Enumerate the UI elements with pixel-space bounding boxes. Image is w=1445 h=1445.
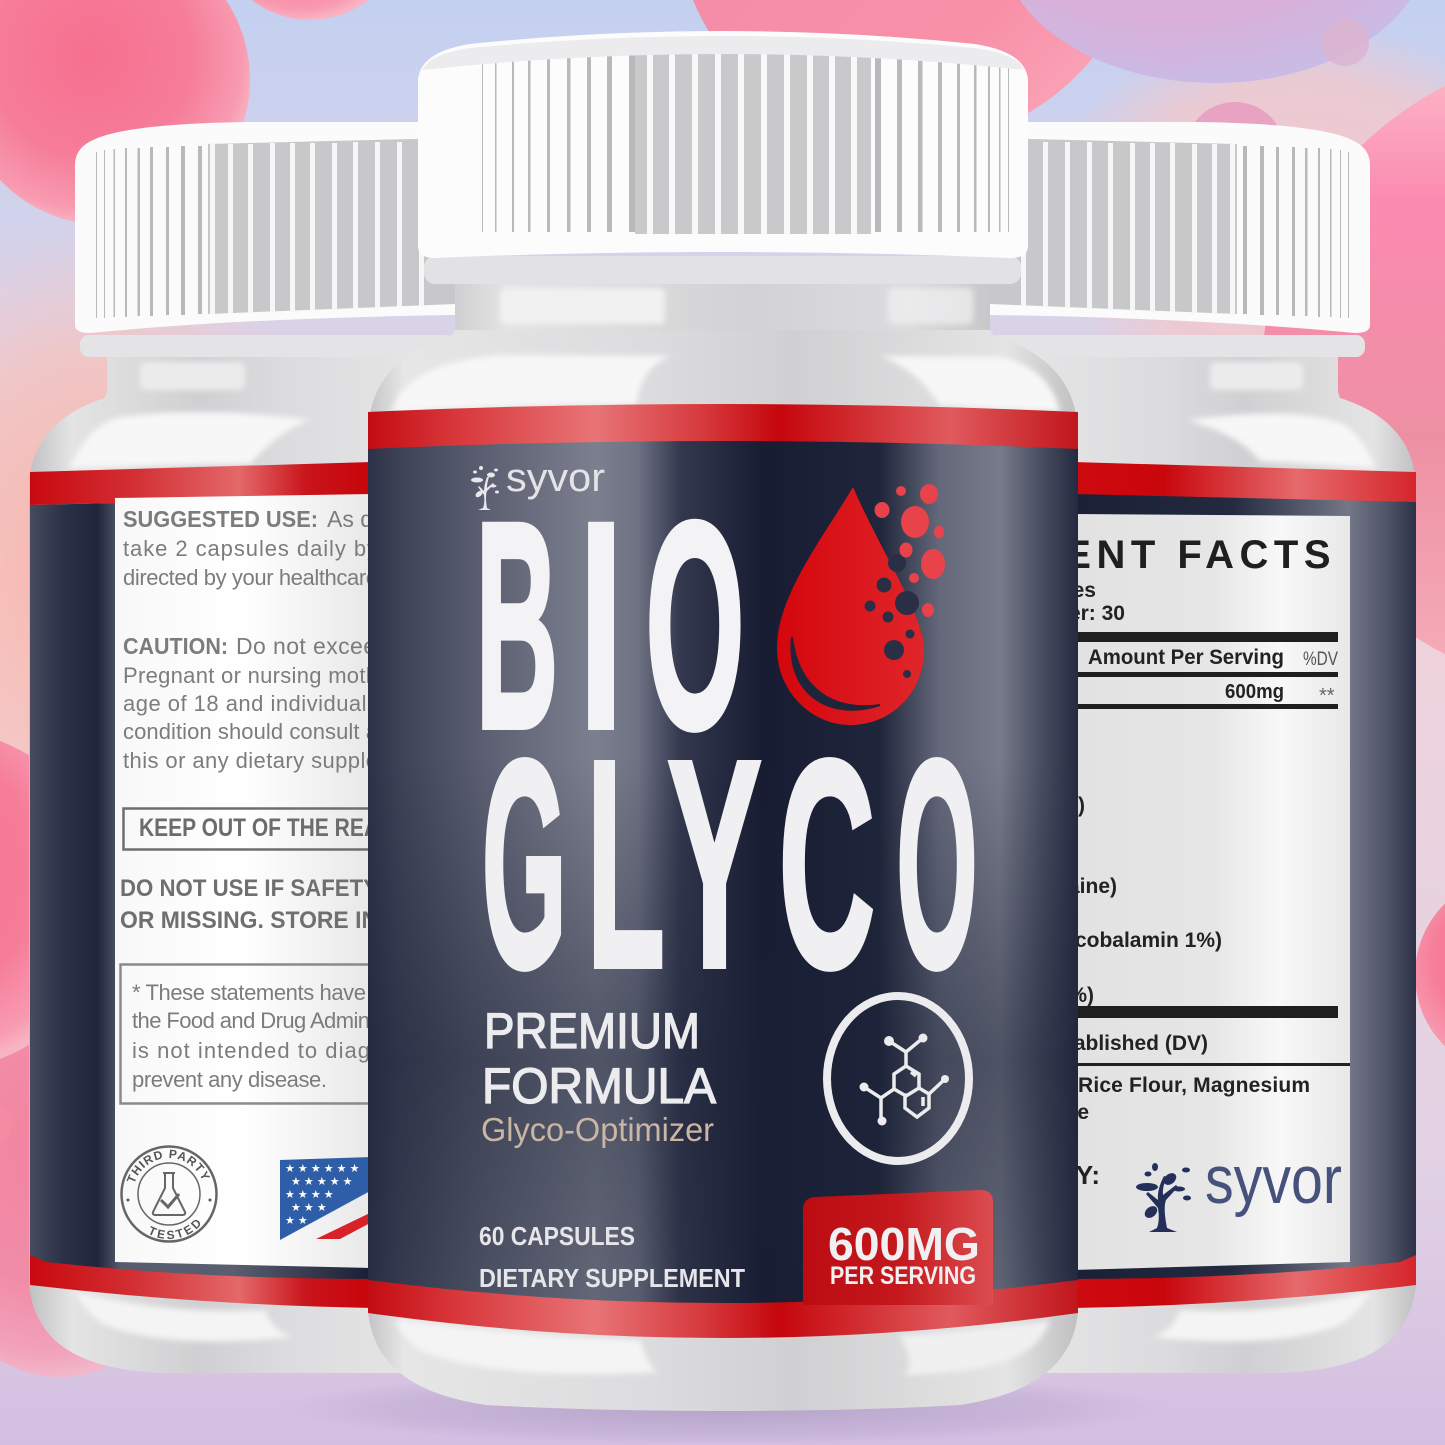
navy label xyxy=(368,441,1078,1304)
other ingredients text: Rice Flour, Magnesium xyxy=(1078,1074,1310,1097)
left bottle: back label xyxy=(29,122,455,1373)
keep out of reach box: KEEP OUT OF THE REA xyxy=(139,814,379,842)
caution text: age of 18 and individuals xyxy=(123,691,378,716)
center bottle: front label xyxy=(368,31,1078,1411)
right bottle shell xyxy=(990,335,1416,1373)
third party tested badge xyxy=(120,1145,218,1243)
title: GLYCO: Y xyxy=(668,699,761,1029)
right shoulder highlight xyxy=(1187,414,1375,468)
left base highlight xyxy=(75,1292,292,1341)
american flag: ★ ★ ★ ★ ★ xyxy=(291,1176,353,1188)
do not use warning: DO NOT USE IF SAFETY xyxy=(120,875,378,902)
suggested use text: take 2 capsules daily by xyxy=(123,536,378,561)
left bottle cap xyxy=(75,122,455,333)
title: GLYCO: L xyxy=(587,699,665,1029)
suggested use text: As d xyxy=(327,506,373,532)
supplement facts heading: SUPPLEMENT FACTS xyxy=(832,533,1336,577)
center bottle: front label: O xyxy=(645,462,745,790)
left bottle shell xyxy=(29,335,455,1373)
right neck highlight xyxy=(1210,362,1303,390)
title: BIO: B xyxy=(476,462,558,790)
right label red band bottom xyxy=(1073,1255,1416,1308)
right base highlight xyxy=(1153,1292,1370,1341)
serving info xyxy=(847,579,1125,625)
facts table: 1%) xyxy=(1048,794,1085,817)
suggested use text xyxy=(123,506,378,590)
shoulder highlight right xyxy=(880,356,1060,412)
american flag: ★ ★ ★ xyxy=(291,1202,327,1214)
center bottle shell xyxy=(368,280,1078,1411)
facts table xyxy=(1000,632,1350,1066)
third party tested badge: THIRD PARTY xyxy=(126,1150,210,1182)
title: GLYCO xyxy=(482,699,978,1029)
icon: blood drop xyxy=(777,484,945,725)
serving info: Servings Per Container: 30 xyxy=(857,602,1125,625)
do not use warning xyxy=(120,875,378,934)
center bottle: front label: O xyxy=(896,699,978,1029)
caution text: Do not excee xyxy=(236,633,376,659)
suggested use white panel xyxy=(115,494,372,1268)
left neck highlight xyxy=(140,362,245,390)
supplement facts white panel xyxy=(1073,514,1350,1270)
other ingredients text: BY: xyxy=(1057,1160,1100,1190)
FDA disclaimer box: prevent any disease. xyxy=(132,1067,327,1092)
facts table: 1%) xyxy=(1057,984,1094,1007)
syvor logo xyxy=(1136,1142,1342,1232)
600mg per serving badge: PER SERVING xyxy=(830,1262,976,1290)
syvor logo: syvor xyxy=(1205,1142,1342,1218)
capsule count and supplement text: 60 CAPSULES xyxy=(479,1221,635,1251)
other ingredients text: Stearate xyxy=(1006,1101,1089,1124)
capsule count and supplement text: DIETARY SUPPLEMENT xyxy=(479,1263,745,1293)
FDA disclaimer box: the Food and Drug Admin xyxy=(132,1008,370,1033)
title: BIO: I xyxy=(579,462,623,790)
american flag: ★ ★ xyxy=(285,1215,308,1227)
caution text xyxy=(123,633,379,773)
base highlight right xyxy=(900,1320,1050,1375)
left label red band top xyxy=(30,462,372,505)
right label red band top xyxy=(1073,462,1416,505)
caution text: CAUTION: xyxy=(123,633,228,659)
600mg per serving badge: 600MG xyxy=(828,1218,980,1270)
syvor logo small xyxy=(471,456,605,510)
caution text: this or any dietary supple xyxy=(123,748,378,773)
american flag: ★ ★ ★ ★ ★ ★ xyxy=(285,1163,360,1175)
right bottle: supplement facts xyxy=(832,122,1416,1373)
facts table: Not Established (DV) xyxy=(1000,1032,1208,1055)
keep out of reach box xyxy=(124,808,394,850)
facts table: Methylcobalamin 1%) xyxy=(1008,929,1222,952)
premium formula text xyxy=(482,1003,717,1114)
shoulder highlight left xyxy=(392,355,672,412)
serving info: Serving Size: 2 Capsules xyxy=(847,579,1096,602)
icon: molecule in circle xyxy=(827,996,969,1161)
premium formula text: FORMULA xyxy=(482,1058,717,1114)
icon: tree small xyxy=(471,466,499,510)
facts table: Betaine) xyxy=(1034,875,1117,898)
american flag xyxy=(280,1157,372,1240)
FDA disclaimer box xyxy=(120,964,390,1104)
left label red band bottom xyxy=(30,1255,372,1308)
facts table: ** xyxy=(1319,685,1335,707)
caution text: Pregnant or nursing moth xyxy=(123,663,378,688)
right label navy panel xyxy=(1073,494,1416,1290)
facts table: %DV xyxy=(1303,649,1338,670)
capsule count and supplement text xyxy=(479,1221,745,1293)
other ingredients text xyxy=(1006,1074,1310,1190)
third party tested badge: TESTED xyxy=(150,1220,200,1240)
600mg per serving badge xyxy=(803,1190,993,1305)
FDA disclaimer box: * These statements have xyxy=(132,980,366,1005)
top red band xyxy=(368,404,1078,450)
suggested use text: SUGGESTED USE: xyxy=(123,506,318,532)
icon: tree xyxy=(1136,1163,1191,1232)
right bottle cap xyxy=(990,122,1370,333)
suggested use text: directed by your healthcare xyxy=(123,565,378,590)
bottom red band xyxy=(368,1280,1078,1338)
facts table: Amount Per Serving xyxy=(1088,646,1284,669)
syvor logo small: syvor xyxy=(506,456,605,500)
left label navy panel xyxy=(30,497,372,1290)
do not use warning: OR MISSING. STORE IN xyxy=(120,907,378,934)
facts table: 600mg xyxy=(1225,681,1284,703)
neck ring xyxy=(424,256,1021,284)
title: GLYCO: G xyxy=(482,699,567,1029)
base highlight left xyxy=(395,1320,658,1374)
subtitle: glyco-optimizer: Glyco-Optimizer xyxy=(481,1111,714,1148)
center bottle cap xyxy=(418,31,1028,258)
neck highlights xyxy=(500,288,973,324)
american flag: ★ ★ ★ ★ xyxy=(285,1189,334,1201)
FDA disclaimer box: is not intended to diag xyxy=(132,1038,370,1063)
left shoulder highlight xyxy=(70,412,310,468)
title: GLYCO: C xyxy=(779,699,875,1029)
caution text: condition should consult a xyxy=(123,719,379,744)
neck xyxy=(455,280,990,330)
premium formula text: PREMIUM xyxy=(484,1003,700,1059)
